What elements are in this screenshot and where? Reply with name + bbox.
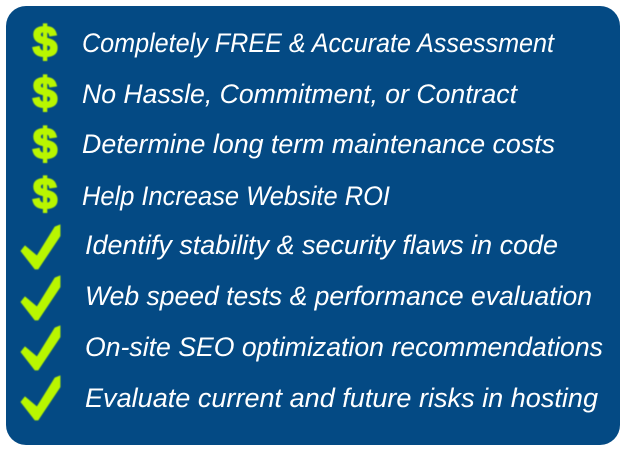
benefit: speed tests: Web speed tests & performance evaluation xyxy=(85,281,592,311)
icon: dollar sign 4: $ xyxy=(33,170,57,219)
benefit: no hassle: No Hassle, Commitment, or Contract xyxy=(82,79,518,109)
benefit: hosting risks: Evaluate current and future risks in hosting xyxy=(85,383,598,413)
icon: dollar sign 2: $ xyxy=(33,69,57,118)
benefit: SEO recommendations: On-site SEO optimization recommendations xyxy=(85,332,603,362)
benefit: free assessment: Completely FREE & Accurate Assessment xyxy=(82,28,555,58)
benefit: stability and security: Identify stability & security flaws in code xyxy=(85,230,558,260)
icon: dollar sign 1: $ xyxy=(33,18,57,67)
benefit: maintenance costs: Determine long term maintenance costs xyxy=(82,129,555,159)
benefit: website ROI: Help Increase Website ROI xyxy=(82,181,390,211)
icon: dollar sign 3: $ xyxy=(33,120,57,169)
icon: check mark 3 xyxy=(21,326,60,370)
icon: check mark 2 xyxy=(21,276,60,320)
icon: check mark 4 xyxy=(21,376,60,420)
icon: check mark 1 xyxy=(21,225,60,269)
